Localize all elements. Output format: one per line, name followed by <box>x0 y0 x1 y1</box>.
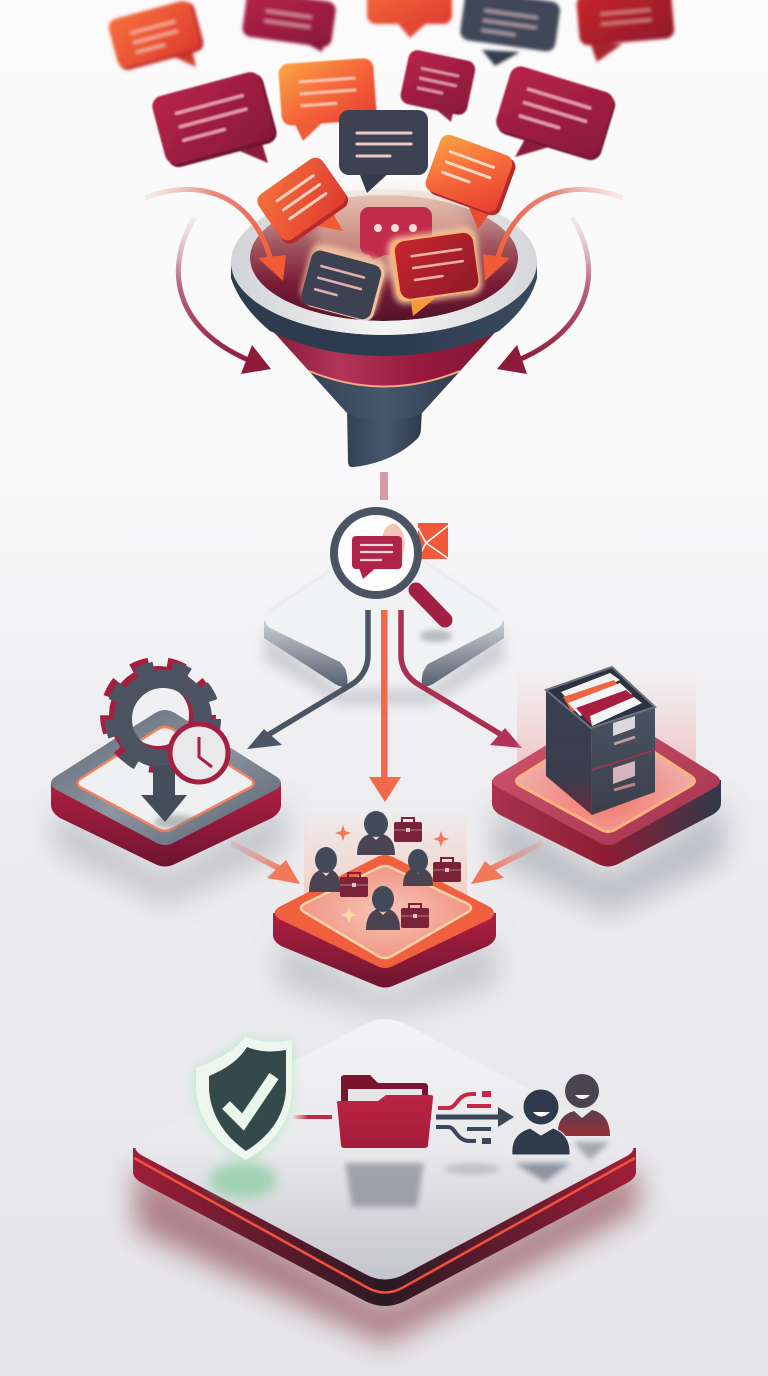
back person reflection <box>573 1142 610 1160</box>
bubble: crimson centre right <box>399 49 477 122</box>
icon: data flow arrow <box>436 1091 514 1144</box>
platform: output shadow <box>135 1165 640 1345</box>
person 2 <box>309 847 341 892</box>
platform surface <box>265 542 503 680</box>
person 1 <box>357 811 395 855</box>
flow crimson dash <box>482 1091 491 1097</box>
platform wall <box>273 913 496 988</box>
funnel opening <box>250 195 518 321</box>
pale bubble behind <box>382 524 405 560</box>
bubble: slate above funnel <box>339 110 428 193</box>
cabinet right face <box>591 707 655 815</box>
platform shadow: left <box>55 800 285 905</box>
folder reflection <box>345 1163 424 1207</box>
icon: shield <box>196 1036 292 1161</box>
icon: filing cabinet <box>546 667 655 815</box>
flow main arrow <box>436 1114 500 1120</box>
bubble: orange top left <box>107 0 205 72</box>
person 4 <box>366 886 400 930</box>
funnel <box>231 189 537 467</box>
orange glow column <box>304 807 467 897</box>
arrow: gear platform to people <box>231 843 300 884</box>
flow reflection <box>444 1163 500 1175</box>
platform shadow: centre <box>280 935 495 1015</box>
funnel highlight line <box>309 371 460 386</box>
arrow: lower right to funnel <box>497 217 589 374</box>
folder front <box>337 1095 433 1148</box>
platform wall <box>51 783 281 866</box>
platform wall left <box>264 620 348 687</box>
briefcase 2 <box>340 873 368 897</box>
pink glow column <box>517 667 696 762</box>
gear side <box>105 662 211 768</box>
flow arrow head <box>498 1107 514 1127</box>
gear down arrow <box>141 765 187 822</box>
icon: gear with arrow and clock <box>105 662 228 829</box>
platform surface halo <box>270 542 498 668</box>
funnel rim <box>231 189 537 335</box>
folders <box>561 673 642 726</box>
icon: team <box>309 811 461 930</box>
message bubble <box>352 536 402 579</box>
connector: shield to folder <box>292 1115 332 1119</box>
top row of speech bubbles <box>107 0 675 72</box>
platform: cabinet <box>492 667 721 866</box>
briefcase 3 <box>433 858 461 882</box>
flow crimson <box>438 1094 491 1108</box>
platform shadow <box>264 630 504 705</box>
funnel rim front <box>231 258 537 335</box>
icon: users <box>512 1074 610 1155</box>
platform frame <box>51 710 281 845</box>
funnel inner glow <box>315 190 475 280</box>
back user <box>558 1074 610 1136</box>
person 3 <box>403 849 433 886</box>
check mark <box>226 1076 274 1122</box>
arrow: cabinet platform to people <box>471 843 542 884</box>
bubble: orange funnel left <box>254 154 352 247</box>
bubble: dots in funnel <box>360 207 432 260</box>
magnifier handle <box>416 590 445 620</box>
arrow: upper left into funnel <box>145 189 286 281</box>
funnel lower cone <box>309 371 460 422</box>
bubble: orange top centre <box>367 0 452 38</box>
front user <box>512 1089 570 1155</box>
flow slate dash <box>482 1138 491 1144</box>
bubble: red funnel front <box>389 229 481 316</box>
people reflection <box>514 1163 571 1182</box>
icon: envelope <box>418 523 449 559</box>
cabinet left face <box>546 690 592 815</box>
platform top <box>492 711 720 845</box>
arrow shadow <box>154 815 198 829</box>
platform neon line <box>134 1158 635 1292</box>
bubble: red top right <box>576 0 675 62</box>
briefcase 1 <box>394 818 422 842</box>
briefcase 4 <box>401 904 429 928</box>
bubble: orange funnel right <box>422 132 519 229</box>
funnel spout <box>347 408 422 467</box>
drawer divider <box>592 750 655 770</box>
platform wall <box>492 780 721 866</box>
platform inner <box>301 866 471 958</box>
platform wall right <box>422 620 504 686</box>
arrow: to cabinet platform <box>401 610 522 748</box>
platform shadow: right <box>495 800 725 915</box>
arrow: to people platform <box>369 610 401 802</box>
platform: output <box>133 1019 636 1306</box>
funnel cone <box>270 328 499 420</box>
platform: gear <box>51 710 281 866</box>
folder back <box>341 1075 428 1110</box>
second row of speech bubbles <box>150 49 618 170</box>
platform: people <box>273 807 496 988</box>
bubble: orange centre left <box>278 58 377 141</box>
magnifier lens <box>334 511 418 595</box>
shield glow <box>196 1036 292 1161</box>
drawer labels <box>613 716 635 790</box>
arrow: lower left to funnel <box>178 217 271 374</box>
platform inner glow <box>516 724 694 832</box>
folder paper <box>348 1089 422 1103</box>
green reflection <box>209 1162 277 1198</box>
bubble: slate in funnel <box>299 248 386 323</box>
bubble glow in funnel <box>298 226 484 319</box>
shield inner <box>209 1047 286 1151</box>
gear face <box>110 666 216 772</box>
bubble: crimson right <box>493 64 618 163</box>
platform surface <box>136 1019 634 1280</box>
platform top <box>274 855 494 968</box>
handle shadow <box>420 630 452 642</box>
connector below funnel <box>380 472 388 500</box>
sparkles <box>335 825 449 923</box>
platform: analysis <box>264 542 504 705</box>
icon: folder <box>337 1075 433 1148</box>
platform inner window <box>78 727 254 831</box>
bubble: crimson top <box>241 0 337 52</box>
arrow: upper right into funnel <box>483 189 623 281</box>
funnel dark band <box>231 262 537 356</box>
clock <box>170 724 228 782</box>
platform wall <box>133 1148 636 1306</box>
shield outer <box>196 1036 292 1160</box>
arrow: to gear platform <box>247 610 368 749</box>
bubble: slate top <box>459 0 561 66</box>
flow slate <box>436 1127 491 1141</box>
cabinet top <box>546 667 655 728</box>
icon: magnifying glass <box>334 511 445 620</box>
bubble: crimson left <box>150 69 279 170</box>
